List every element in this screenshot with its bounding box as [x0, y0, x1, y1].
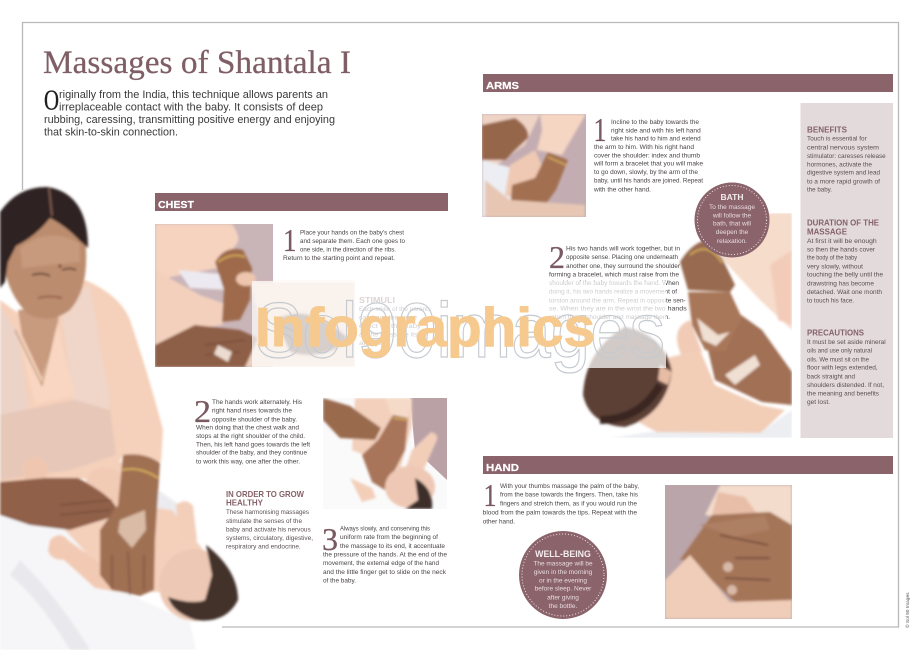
watermark: Infographics: Infographics — [255, 296, 595, 358]
step 2 arms text: doing it, his two hands realize a movement of — [549, 289, 677, 296]
benefits: hormones, activate the — [807, 161, 872, 168]
circle: bath: relaxation. — [717, 238, 747, 245]
circle: bath: deepen the — [716, 229, 749, 236]
section bar: arms: ARMS — [486, 80, 519, 92]
section bar: chest: CHEST — [158, 199, 195, 211]
benefits: stimulator: caresses release — [807, 153, 886, 160]
precautions: back straight and — [807, 373, 855, 380]
step 2 chest text: When doing that the chest walk and — [196, 424, 299, 431]
circle: well-being: The massage will be — [533, 561, 593, 568]
step 2 chest text: The hands work alternately. His — [212, 399, 303, 406]
circle: well-being: given in the morning — [534, 569, 593, 576]
photo: mother massaging baby — [0, 187, 238, 650]
step 2 arms text: return to the shoulder and massage them. — [549, 314, 670, 321]
stimuli text: STIMULI — [359, 295, 395, 305]
step 2 chest text: opposite shoulder of the baby. — [212, 416, 297, 423]
precautions: oils and use only natural — [807, 347, 873, 354]
duration: detached. Wait one month — [807, 289, 882, 296]
hair — [0, 187, 88, 288]
step 1 arms text — [593, 112, 703, 194]
in order to grow healthy text: stimulate the senses of the — [226, 518, 302, 525]
step 1 arms text: Incline to the baby towards the — [611, 119, 699, 126]
precautions: shoulders distended. If not, — [807, 382, 884, 389]
step 2 chest text: shoulder of the baby, and they continue — [196, 449, 307, 456]
stimuli text: always. — [359, 340, 385, 347]
section bar: hand: HAND — [486, 462, 519, 474]
step 2 chest text: 2 — [194, 393, 211, 429]
precautions: the meaning and benefits — [807, 391, 880, 398]
stimuli text: can have the same — [359, 314, 417, 322]
step 2 arms text: se. When they are in the wrist the two hands — [549, 306, 687, 313]
precautions: It must be set aside mineral — [807, 339, 886, 346]
step 1 hand text: other hand. — [483, 518, 515, 525]
circle: well-being: after giving — [547, 594, 579, 601]
precautions: oils. We must sit on the — [807, 356, 869, 363]
photo: chest step 2 — [323, 398, 447, 509]
duration: to touch his face. — [807, 297, 854, 304]
duration: MASSAGE — [807, 226, 847, 236]
duration: so then the hands cover — [807, 246, 876, 253]
precautions: PRECAUTIONS — [807, 328, 864, 338]
intro text block: riginally from the India, this technique allows parents an — [59, 89, 328, 101]
step 2 arms text: opposite sense. Placing one underneath — [566, 254, 678, 261]
circle: bath: bath, that will — [713, 221, 752, 228]
intro text block: that skin-to-skin connection. — [44, 126, 178, 138]
step 1 arms text: 1 — [594, 112, 606, 149]
duration: the body of the baby — [807, 255, 858, 262]
step 1 arms text: take his hand to him and extend — [611, 136, 701, 143]
photo: chest step 1 — [155, 224, 355, 367]
intro text block — [44, 84, 335, 138]
step 2 arms text: His two hands will work together, but in — [566, 246, 680, 253]
photo: hand massage — [665, 485, 792, 619]
circle: well-being — [519, 531, 607, 619]
stimuli text: as the massage itself — [359, 332, 425, 338]
step 1 hand text: With your thumbs massage the palm of the baby, — [500, 483, 639, 490]
precautions: floor with legs extended, — [807, 365, 878, 372]
circle: bath: will follow the — [712, 212, 752, 219]
step 2 chest text: Then, his left hand goes towards the left — [196, 441, 310, 448]
section bar: arms — [483, 74, 893, 92]
in order to grow healthy text: respiratory and endocrine. — [226, 543, 301, 550]
step 1 hand text — [483, 477, 639, 525]
step 1 chest text: and separate them. Each one goes to — [300, 238, 405, 245]
step 3 chest text: the pressure of the hands. At the end of the — [323, 552, 447, 559]
step 2 chest text: stops at the right shoulder of the child. — [196, 433, 305, 440]
faded overlay — [252, 281, 666, 368]
step 3 chest text: movement, the external edge of the hand — [323, 560, 439, 567]
precautions: get lost. — [807, 399, 830, 406]
step 1 chest text: Return to the starting point and repeat. — [283, 255, 395, 262]
intro text block: irreplaceable contact with the baby. It consists of deep — [59, 102, 323, 114]
title: Massages of Shantala I — [43, 45, 351, 81]
step 2 chest text: right hand rises towards the — [212, 407, 292, 414]
circle: well-being: WELL-BEING — [535, 549, 591, 559]
watermark: Sol90images: Sol90images — [255, 286, 665, 374]
in order to grow healthy text: IN ORDER TO GROW — [226, 489, 304, 499]
step 1 hand text: from the base towards the fingers. Then, take his — [500, 492, 639, 499]
stimuli text: effect on the baby — [359, 323, 422, 330]
intro text block: rubbing, caressing, transmitting positive energy and enjoying — [44, 114, 335, 126]
in order to grow healthy text: These harmonising massages — [226, 509, 310, 516]
step 3 chest text: Always slowly, and conserving this — [340, 526, 431, 533]
duration: drawstring has become — [807, 280, 874, 287]
step 2 arms text: another one, they surround the shoulder — [566, 263, 681, 270]
section bar: chest — [155, 193, 448, 211]
step 1 chest text: Place your hands on the baby's chest — [300, 230, 404, 236]
intro text block: O — [44, 84, 59, 116]
step 1 arms text: with the other hand. — [593, 187, 651, 194]
stimuli text: Each smile of the parents — [359, 306, 432, 313]
benefits — [807, 124, 886, 194]
step 1 hand text: 1 — [484, 477, 496, 513]
step 1 chest text: 1 — [283, 222, 296, 258]
benefits: Touch is essential for — [807, 136, 868, 143]
in order to grow healthy text: systems, circulatory, digestive, — [226, 535, 313, 542]
step 3 chest text: 3 — [322, 521, 338, 557]
in order to grow healthy text — [226, 489, 313, 550]
circle: well-being: before sleep. Never — [535, 586, 592, 593]
benefits: digestive system and lead — [807, 170, 880, 177]
baby body — [65, 462, 215, 592]
credit: © Sol 90 Images — [904, 592, 911, 628]
benefits: central nervous system — [807, 144, 879, 151]
step 2 chest text: to work this way, one after the other. — [196, 458, 300, 465]
step 1 hand text: fingers and stretch them, as if you would run the — [500, 501, 637, 508]
step 1 arms text: baby, until his hands are joined. Repeat — [594, 177, 703, 184]
step 1 arms text: the arm to him. With his right hand — [594, 144, 694, 151]
tunic — [0, 280, 163, 488]
baby head — [158, 549, 214, 622]
step 2 arms text — [549, 239, 687, 321]
duration — [807, 218, 883, 304]
panel: sidebar — [800, 103, 893, 438]
forearms and hands — [0, 478, 116, 530]
white sheet — [0, 512, 196, 650]
photo: arms step 1 — [482, 114, 586, 217]
step 2 arms text: shoulder of the baby towards the hand. When — [549, 280, 679, 287]
step 3 chest text: of the baby. — [323, 577, 356, 584]
duration: touching the belly until the — [807, 272, 883, 279]
benefits: BENEFITS — [807, 124, 847, 134]
step 1 arms text: to go down, slowly, by the arm of the — [594, 169, 698, 176]
step 1 arms text: cover the shoulder: index and thumb — [594, 152, 700, 159]
photo: arms step 2 — [583, 213, 792, 438]
step 3 chest text: the massage to its end, it accentuate — [340, 543, 445, 550]
step 2 arms text: torsion around the arm. Repeat in opposite sen- — [549, 297, 686, 304]
step 3 chest text: uniform rate from the beginning of — [340, 534, 438, 541]
stimuli text — [359, 295, 432, 347]
step 1 chest text: one side, in the direction of the ribs. — [300, 246, 396, 254]
step 1 hand text: blood from the palm towards the tips. Repeat with the — [483, 510, 637, 517]
circle: bath: BATH — [721, 192, 743, 202]
in order to grow healthy text: baby and activate his nervous — [226, 526, 311, 533]
step 2 chest text — [194, 393, 310, 465]
duration: DURATION OF THE — [807, 218, 879, 228]
step 1 arms text: will form a bracelet that you will make — [593, 161, 703, 168]
duration: At first it will be enough — [807, 238, 877, 245]
section bar: hand — [483, 456, 893, 474]
benefits: to a more rapid growth of — [807, 178, 880, 185]
circle: bath: To the massage — [709, 204, 755, 211]
duration: very slowly, without — [807, 263, 863, 270]
step 3 chest text — [322, 521, 447, 584]
step 1 chest text — [283, 222, 405, 262]
in order to grow healthy text: HEALTHY — [226, 498, 263, 508]
circle: well-being: or in the evening — [539, 577, 587, 584]
step 2 arms text: 2 — [549, 239, 565, 275]
neck and face — [18, 305, 60, 378]
circle: bath — [694, 182, 770, 258]
step 3 chest text: and the little finger get to slide on the neck — [323, 569, 447, 576]
precautions — [807, 328, 886, 406]
step 2 arms text: forming a bracelet, which must raise from the — [549, 271, 679, 278]
step 1 arms text: right side and with his left hand — [611, 127, 701, 134]
circle: well-being: the bottle. — [549, 603, 577, 610]
benefits: the baby. — [807, 187, 832, 194]
